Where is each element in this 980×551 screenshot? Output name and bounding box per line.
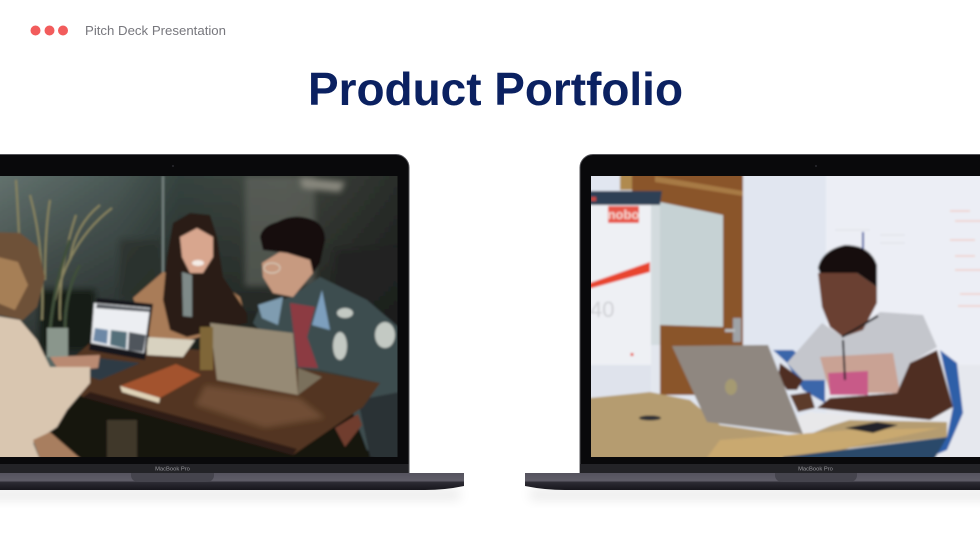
laptop in photo: [834, 419, 849, 426]
woman centre: [133, 272, 247, 340]
white notebook: [147, 337, 195, 357]
lower dark area: [50, 394, 371, 457]
MacBook Pro label: MacBook Pro: [798, 466, 833, 472]
photo: student at a laptop: [581, 166, 980, 467]
nobo sign: [608, 206, 639, 223]
leather notebook: [120, 364, 201, 398]
table: [591, 390, 948, 457]
40: 40: [590, 297, 614, 322]
base shadow: [530, 490, 980, 499]
header dots: [30, 26, 68, 36]
trackpad notch: [775, 473, 857, 482]
laptop mockup: left: [0, 154, 464, 499]
beer glass: [200, 327, 213, 370]
laptop base: [0, 473, 464, 490]
chair: [773, 350, 825, 403]
laptop mockup: right: [525, 154, 980, 499]
trackpad notch: [131, 473, 214, 482]
man: [778, 363, 803, 390]
woman left: [50, 355, 100, 372]
laptop base: [525, 473, 980, 490]
deck label: Pitch Deck Presentation: [85, 23, 226, 38]
MacBook Pro label: MacBook Pro: [155, 466, 190, 472]
title: Product Portfolio: [308, 63, 683, 115]
phone: [845, 422, 898, 433]
glass: [47, 328, 68, 357]
toolbar: [581, 191, 662, 205]
photo: student at a laptop: nobo: [608, 207, 639, 222]
table: [52, 343, 380, 455]
man jacket: [252, 276, 398, 452]
laptop lid: [580, 154, 980, 473]
base shadow: [0, 490, 460, 499]
small laptop: [89, 298, 153, 360]
man hand: [335, 414, 362, 447]
photo: team around a table: [0, 166, 410, 467]
door: [630, 176, 744, 397]
right whiteboard: [826, 166, 980, 366]
silver laptop: [298, 368, 322, 395]
laptop lid: [0, 154, 409, 473]
left poster: [591, 203, 652, 364]
